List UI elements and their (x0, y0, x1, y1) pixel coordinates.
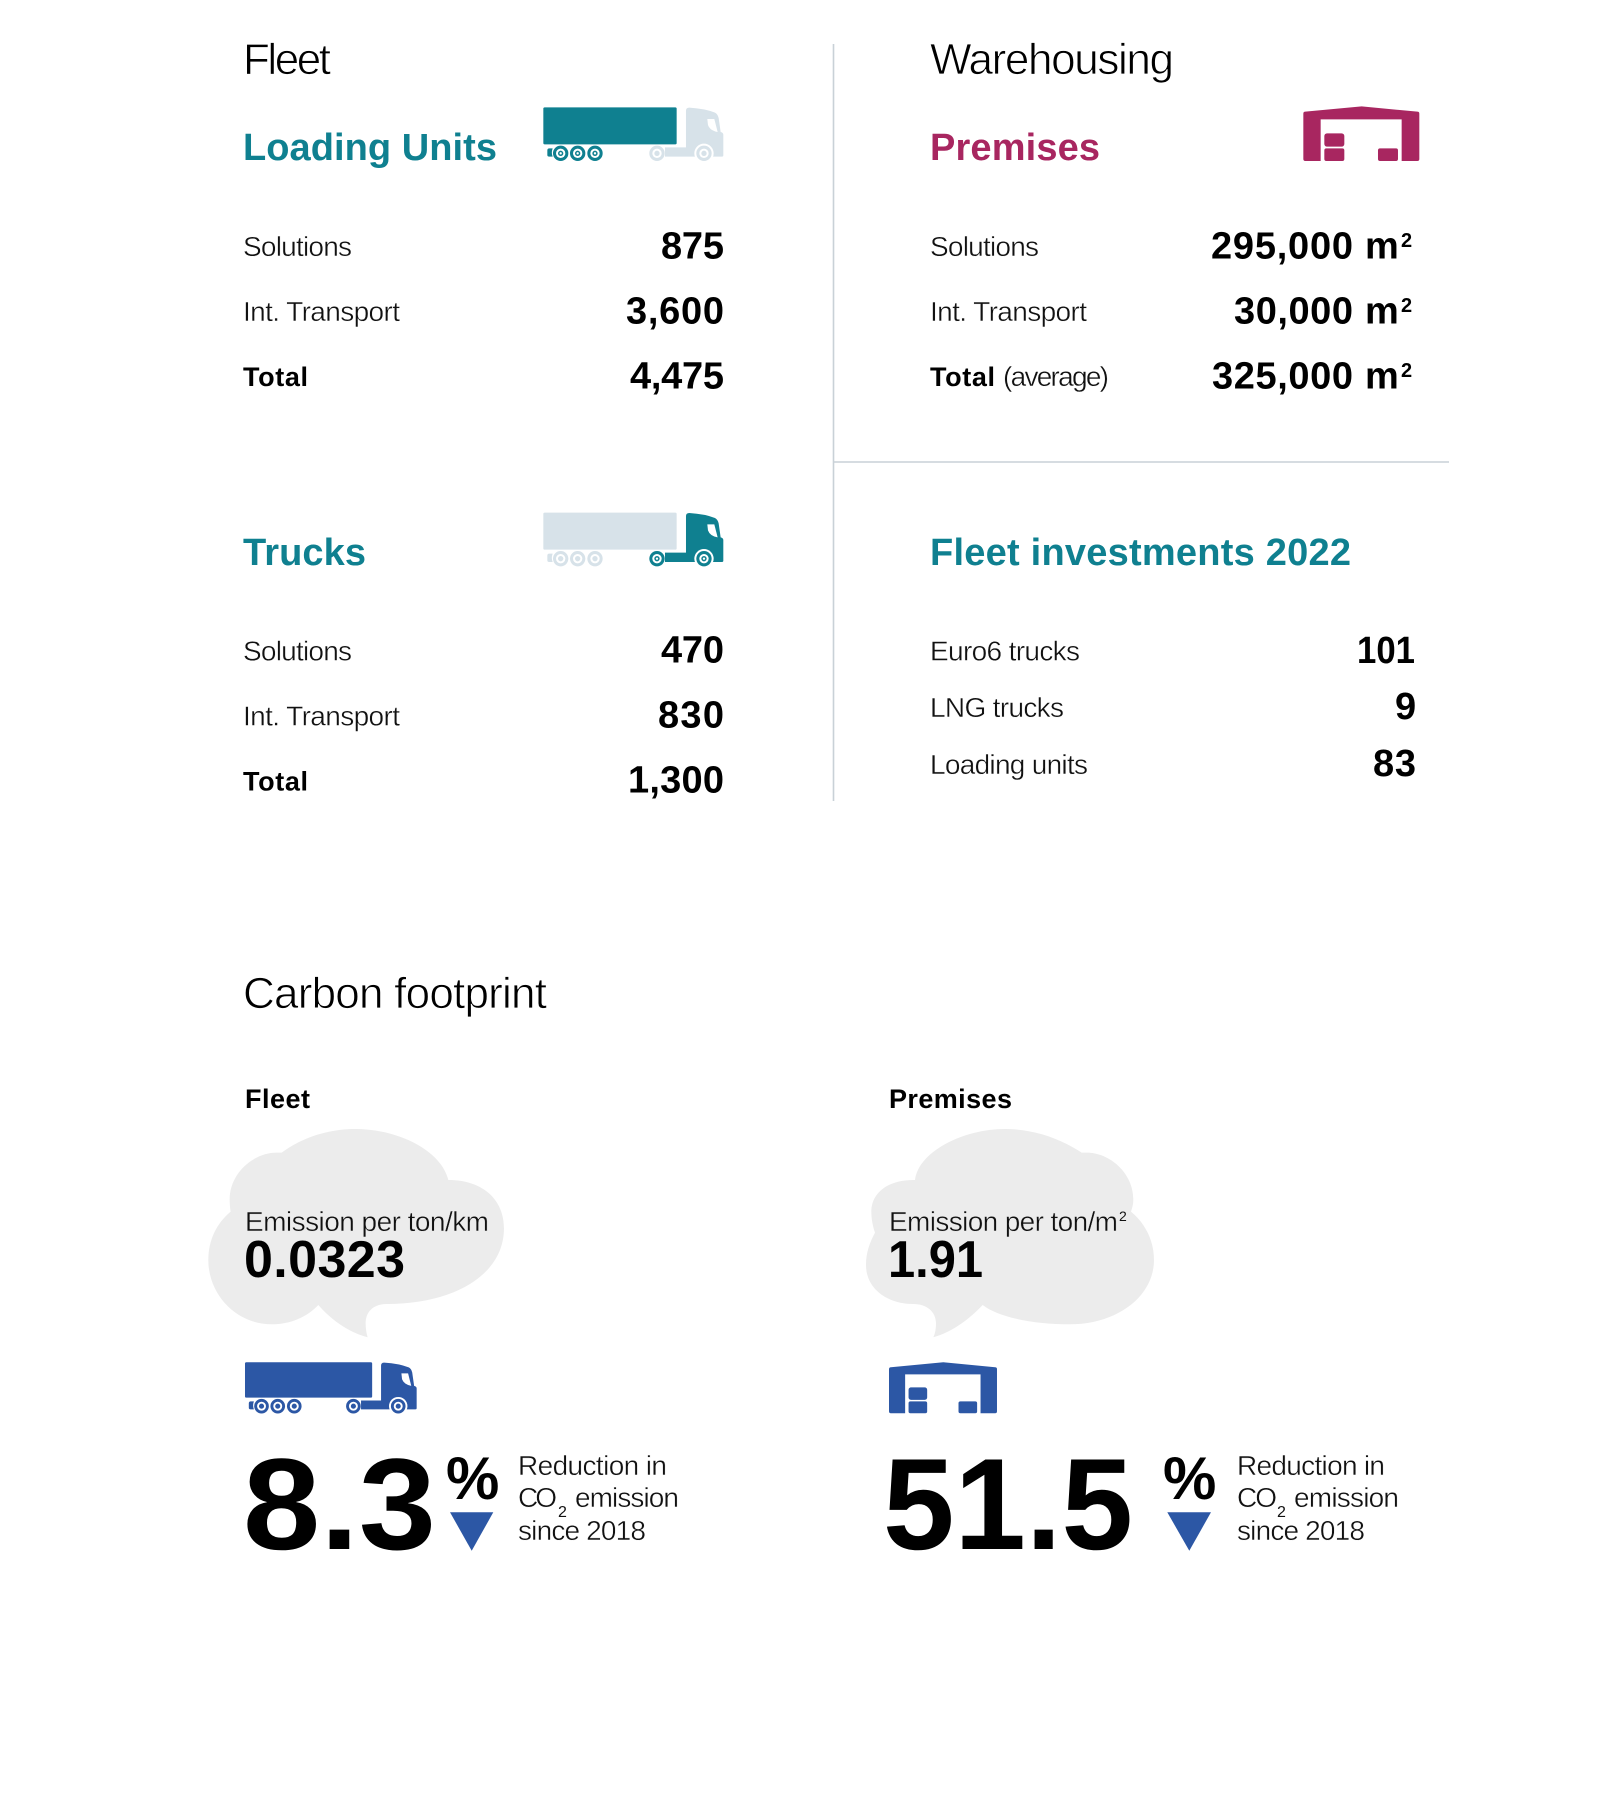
row: Solutions: 470 (661, 630, 724, 672)
speech cloud: fleet emission (208, 1129, 504, 1337)
subheading: Fleet investments 2022: Fleet investments 2022 (930, 532, 1351, 574)
row: LNG trucks: LNG trucks (930, 692, 1064, 723)
row: Total average: (average) (1003, 361, 1109, 392)
row: Solutions: Solutions (243, 636, 352, 666)
row: Total: 4,475 (630, 356, 724, 398)
text: Emission per ton/m2: 2 (1119, 1208, 1127, 1224)
stat: 51.5 percent: 51.5 (883, 1431, 1133, 1577)
heading: Carbon footprint: Carbon footprint (243, 969, 547, 1018)
row: Int. Transport: Int. Transport (930, 296, 1087, 327)
row: Solutions: 295,000 (1211, 226, 1353, 268)
label: Fleet: Fleet (245, 1084, 310, 1114)
row: Total average: 325,000 (1212, 356, 1353, 398)
row: Int. Transport: 3,600 (626, 290, 724, 332)
panel: fleet loading units (243, 35, 724, 398)
icon: truck with highlighted trailer (543, 107, 723, 163)
row: LNG trucks (930, 686, 1416, 728)
row: Int. Transport: 2 (1401, 295, 1412, 317)
row: Euro6 trucks: 101 (1357, 630, 1415, 672)
text: reduction note: Reduction in (518, 1450, 667, 1481)
row: Total: 1,300 (628, 760, 724, 802)
heading: Fleet: Fleet (243, 35, 331, 84)
row: Total: Total (243, 362, 308, 392)
row: Int. Transport (243, 290, 724, 332)
text: reduction note: since 2018 (518, 1515, 646, 1546)
subheading: Loading Units: Loading Units (243, 127, 497, 169)
text: Emission per ton/m2: Emission per ton/m (889, 1206, 1118, 1237)
subheading: Premises: Premises (930, 127, 1100, 169)
panel: carbon footprint fleet (208, 1084, 679, 1577)
speech cloud: premises emission (866, 1129, 1154, 1337)
subheading: Trucks: Trucks (243, 532, 366, 574)
heading: Warehousing: Warehousing (930, 35, 1174, 84)
arrow: down triangle (450, 1512, 493, 1551)
row: Solutions: 875 (661, 226, 724, 268)
text: reduction note (518, 1450, 679, 1546)
row: Euro6 trucks (930, 630, 1415, 672)
row: Int. Transport: 830 (658, 694, 724, 736)
text: Emission per ton/km: Emission per ton/km (245, 1206, 489, 1237)
row: Total average: 2 (1401, 360, 1412, 382)
row: LNG trucks: 9 (1395, 686, 1416, 728)
icon: truck with highlighted cab (543, 513, 723, 568)
text: reduction note: CO (1237, 1482, 1277, 1513)
stat: 8.3 percent: 8.3 (243, 1431, 436, 1577)
row: Int. Transport (930, 290, 1412, 332)
percent sign: % (446, 1445, 499, 1512)
row: Solutions: Solutions (243, 231, 352, 262)
text: reduction note: emission (575, 1482, 679, 1513)
row: Solutions: Solutions (930, 231, 1039, 262)
row: Total (243, 760, 724, 802)
row: Solutions (930, 226, 1412, 268)
text: reduction note: emission (1294, 1482, 1399, 1513)
text: reduction note: since 2018 (1237, 1515, 1365, 1546)
text: reduction note (1237, 1450, 1399, 1546)
icon: blue truck (245, 1362, 417, 1415)
icon: blue warehouse (889, 1362, 997, 1413)
row: Total average: Total (930, 362, 995, 392)
row: Int. Transport: Int. Transport (243, 296, 400, 327)
row: Loading units: 83 (1373, 743, 1416, 785)
value: 0.0323: 0.0323 (244, 1231, 405, 1289)
panel: fleet trucks (243, 513, 724, 802)
value: 1.91: 1.91 (888, 1231, 983, 1289)
row: Int. Transport (243, 694, 724, 736)
panel: fleet investments 2022 (930, 532, 1416, 785)
row: Loading units (930, 743, 1416, 785)
row: Total (243, 356, 724, 398)
row: Solutions: 2 (1401, 230, 1412, 252)
icon: warehouse (1303, 106, 1419, 161)
row: Int. Transport: Int. Transport (243, 700, 400, 732)
row: Total: Total (243, 766, 308, 796)
row: Int. Transport: 30,000 (1234, 290, 1353, 332)
row: Solutions: m (1365, 226, 1399, 268)
text: reduction note: Reduction in (1237, 1450, 1385, 1481)
label: Premises: Premises (889, 1084, 1012, 1114)
row: Solutions (243, 226, 724, 268)
text: reduction note: 2 (558, 1504, 567, 1521)
text: reduction note: 2 (1277, 1504, 1286, 1521)
row: Int. Transport: m (1365, 290, 1399, 332)
arrow: down triangle (1167, 1512, 1211, 1551)
percent sign: % (1163, 1445, 1216, 1512)
panel: carbon footprint premises (866, 1084, 1399, 1577)
row: Total average: m (1365, 356, 1399, 398)
row: Loading units: Loading units (930, 749, 1088, 780)
row: Euro6 trucks: Euro6 trucks (930, 636, 1080, 666)
row: Solutions (243, 630, 724, 672)
panel: warehousing premises (930, 35, 1419, 398)
row: Total average (930, 356, 1412, 398)
text: reduction note: CO (518, 1482, 557, 1513)
